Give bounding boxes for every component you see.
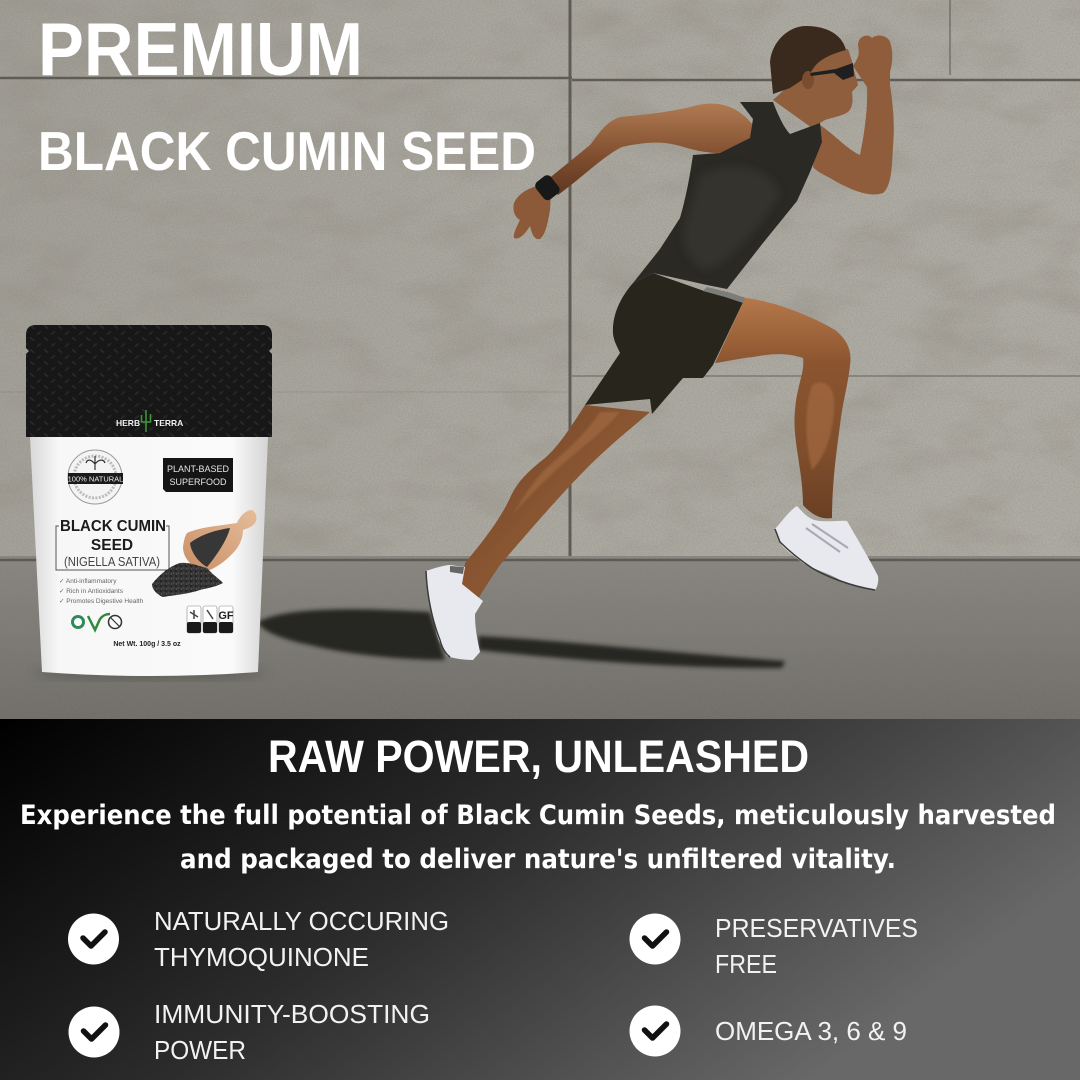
runner shadow on the pavement: [258, 609, 785, 668]
plant-based badge: SUPERFOOD: [169, 477, 227, 487]
raised arm and hand: [813, 35, 894, 195]
pouch benefits list: ✓ Promotes Digestive Health: [59, 598, 144, 605]
benefit: omega: OMEGA 3, 6 & 9: [715, 1016, 907, 1046]
pouch benefits list: ✓ Rich in Antioxidants: [59, 588, 124, 595]
neck and face: [773, 49, 858, 128]
benefit: preservatives free: [630, 913, 918, 979]
pouch benefits list: [59, 578, 144, 605]
certification icons: [71, 614, 122, 630]
product pouch: [26, 325, 272, 680]
shirt: [633, 102, 822, 289]
diet badges: [187, 606, 234, 633]
watch: [533, 173, 562, 202]
ear: [802, 71, 814, 89]
trailing leg highlight: [512, 412, 620, 515]
benefit: immunity: [68, 999, 430, 1065]
benefit: preservatives free: FREE: [715, 949, 777, 979]
benefit: thymoquinone: NATURALLY OCCURING: [154, 906, 449, 936]
shorts: [585, 273, 745, 414]
rear hand: [513, 186, 551, 239]
plant-based badge: PLANT-BASED: [167, 464, 230, 474]
front shoe: [426, 565, 483, 660]
product name: BLACK CUMIN: [60, 518, 166, 535]
pouch benefits list: ✓ Anti-inflammatory: [59, 578, 117, 585]
hair: [770, 26, 846, 94]
brand logo: [116, 410, 183, 432]
title: BLACK CUMIN SEED: BLACK CUMIN SEED: [38, 120, 536, 182]
intro text: [20, 800, 1056, 875]
pouch white body: [30, 437, 268, 676]
brand logo: HERB: [116, 418, 140, 428]
benefit: immunity: POWER: [154, 1035, 246, 1065]
heading: raw power: RAW POWER, UNLEASHED: [268, 731, 809, 782]
intro text: and packaged to deliver nature's unfiltered vitality.: [180, 844, 896, 875]
calf highlight: [806, 382, 834, 470]
runner figure: [426, 26, 894, 660]
bent leg: [715, 298, 850, 518]
product name: SEED: [91, 537, 133, 554]
product name: (NIGELLA SATIVA): [64, 554, 160, 569]
photo background: concrete wall and pavement: [0, 0, 1080, 719]
net weight: Net Wt. 100g / 3.5 oz: [113, 641, 181, 648]
benefit: preservatives free: PRESERVATIVES: [715, 913, 918, 943]
panel: bottom dark gradient: [0, 719, 1080, 1080]
natural badge: 100% NATURAL: [68, 474, 123, 484]
diet badges: GF: [218, 610, 234, 622]
product name: [56, 518, 169, 570]
benefit: thymoquinone: [68, 906, 449, 972]
benefit: immunity: IMMUNITY-BOOSTING: [154, 999, 430, 1029]
benefit: thymoquinone: THYMOQUINONE: [154, 942, 369, 972]
benefit: omega: [630, 1006, 907, 1056]
sunglasses: [810, 63, 854, 80]
shorts piping: [703, 287, 745, 303]
plant-based badge: [163, 458, 233, 492]
wooden scoop with seeds: [152, 510, 256, 597]
rear arm: [547, 104, 753, 195]
shirt highlight: [684, 167, 780, 270]
title: PREMIUM: PREMIUM: [38, 7, 363, 91]
natural badge: [68, 450, 123, 504]
pouch black top: [26, 325, 272, 437]
brand logo: TERRA: [154, 418, 183, 428]
trailing leg: [462, 405, 650, 601]
rear shoe: [775, 506, 878, 590]
